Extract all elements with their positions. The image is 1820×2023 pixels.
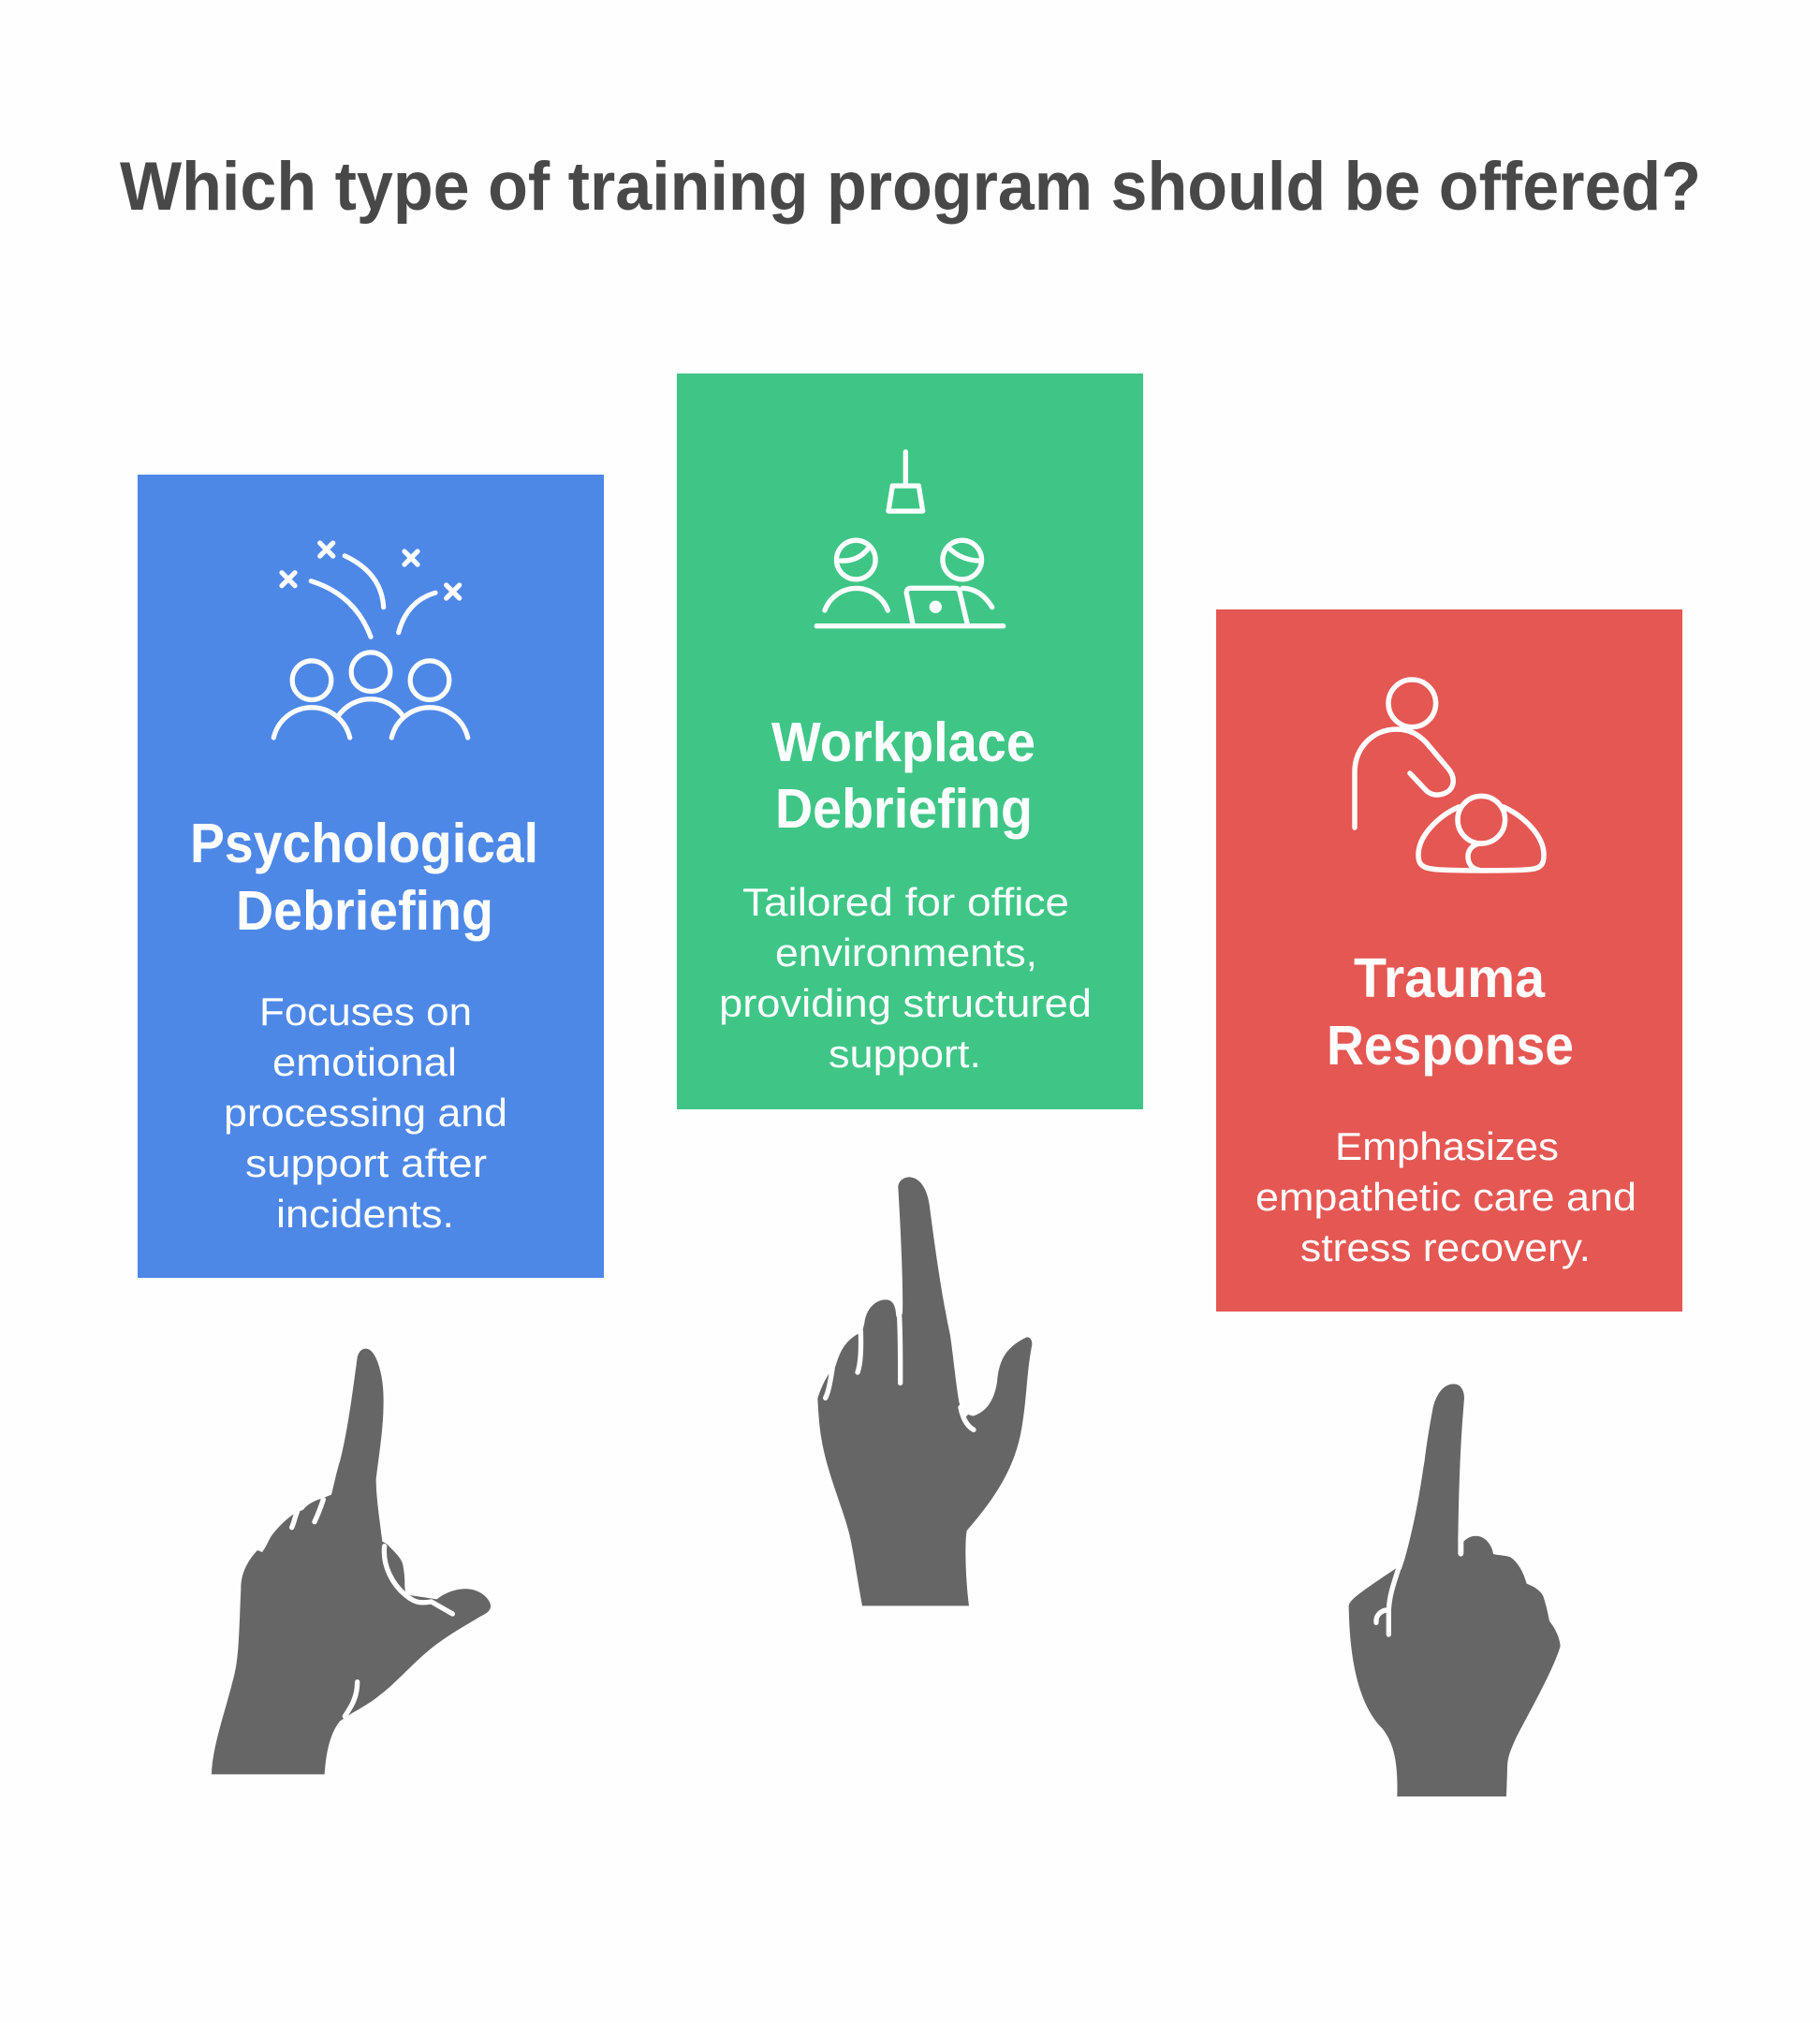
card background: red (1216, 609, 1682, 1312)
card background: blue (138, 475, 604, 1278)
description: support. (829, 1032, 981, 1076)
icon: left hand pointing up with thumb out (212, 1349, 491, 1774)
description: processing and (224, 1091, 507, 1135)
description: emotional (272, 1040, 457, 1084)
heading (1327, 947, 1574, 1077)
description: support after (245, 1141, 487, 1185)
description: stress recovery. (1300, 1225, 1591, 1269)
heading: Workplace (771, 711, 1035, 773)
heading: Trauma (1354, 947, 1546, 1009)
icon: closed hand with index finger up (1349, 1384, 1561, 1796)
description: Emphasizes (1335, 1124, 1559, 1168)
icon: group with fireworks (273, 543, 468, 738)
description: Focuses on (259, 990, 472, 1033)
title: Which type of training program should be offered? (120, 149, 1701, 225)
description (719, 880, 1092, 1076)
panel: Workplace Debriefing (677, 374, 1143, 1109)
description (1255, 1124, 1637, 1269)
icon: two people at a desk under a lamp (816, 452, 1004, 626)
description: empathetic care and (1255, 1175, 1637, 1219)
heading: Response (1327, 1015, 1574, 1077)
heading: Psychological (190, 813, 538, 874)
heading: Debriefing (775, 778, 1033, 840)
icon: carer bending over a person (1355, 680, 1544, 871)
description: Tailored for office (742, 880, 1069, 924)
description (224, 990, 507, 1236)
heading (771, 711, 1035, 840)
heading: Debriefing (236, 880, 493, 942)
heading (190, 813, 538, 942)
panel: Psychological Debriefing (138, 475, 604, 1278)
icon: hand pointing up with fingers raised (817, 1177, 1032, 1605)
description: providing structured (719, 981, 1092, 1025)
panel: Trauma Response (1216, 609, 1682, 1312)
description: incidents. (276, 1192, 454, 1236)
description: environments, (775, 931, 1037, 975)
card background: green (677, 374, 1143, 1109)
